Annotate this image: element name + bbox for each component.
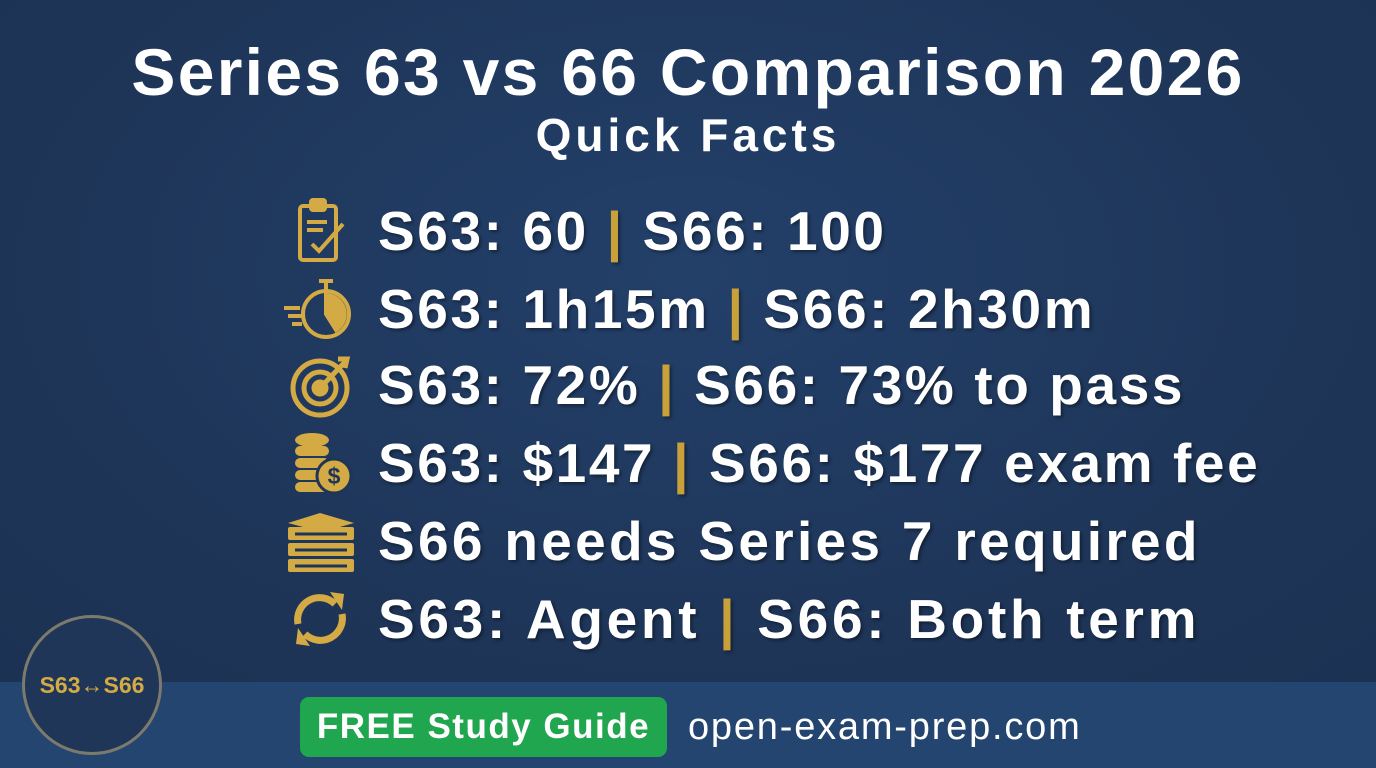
row: pass: S63: 72% | S66: 73% to pass: [378, 354, 1185, 416]
button: FREE Study Guide: FREE Study Guide: [317, 707, 650, 746]
row: questions: S63: 60 | S66: 100: [378, 200, 887, 262]
row: fee: S63: $147 | S66: $177 exam fee: [378, 432, 1260, 494]
badge: S63↔S66: S63↔S66: [40, 672, 144, 698]
icon: coins: $: [328, 463, 341, 489]
url: open-exam-prep.com: [688, 706, 1082, 748]
icon: refresh arrows: [294, 592, 346, 646]
icon: target: [290, 356, 350, 418]
title: Series 63 vs 66 Comparison 2026: [131, 35, 1245, 109]
row: role: S63: Agent | S66: Both term: [378, 588, 1200, 650]
icon: books: [288, 513, 354, 572]
button: FREE Study Guide: [300, 697, 667, 757]
icon: coins: [295, 433, 350, 492]
subtitle: Quick Facts: [536, 109, 840, 161]
badge: S63↔S66: [22, 615, 162, 755]
icon: clipboard: [298, 198, 344, 262]
row: time: S63: 1h15m | S66: 2h30m: [378, 278, 1095, 340]
icon: stopwatch: [284, 279, 351, 339]
row: prerequisite: S66 needs Series 7 required: [378, 510, 1201, 572]
